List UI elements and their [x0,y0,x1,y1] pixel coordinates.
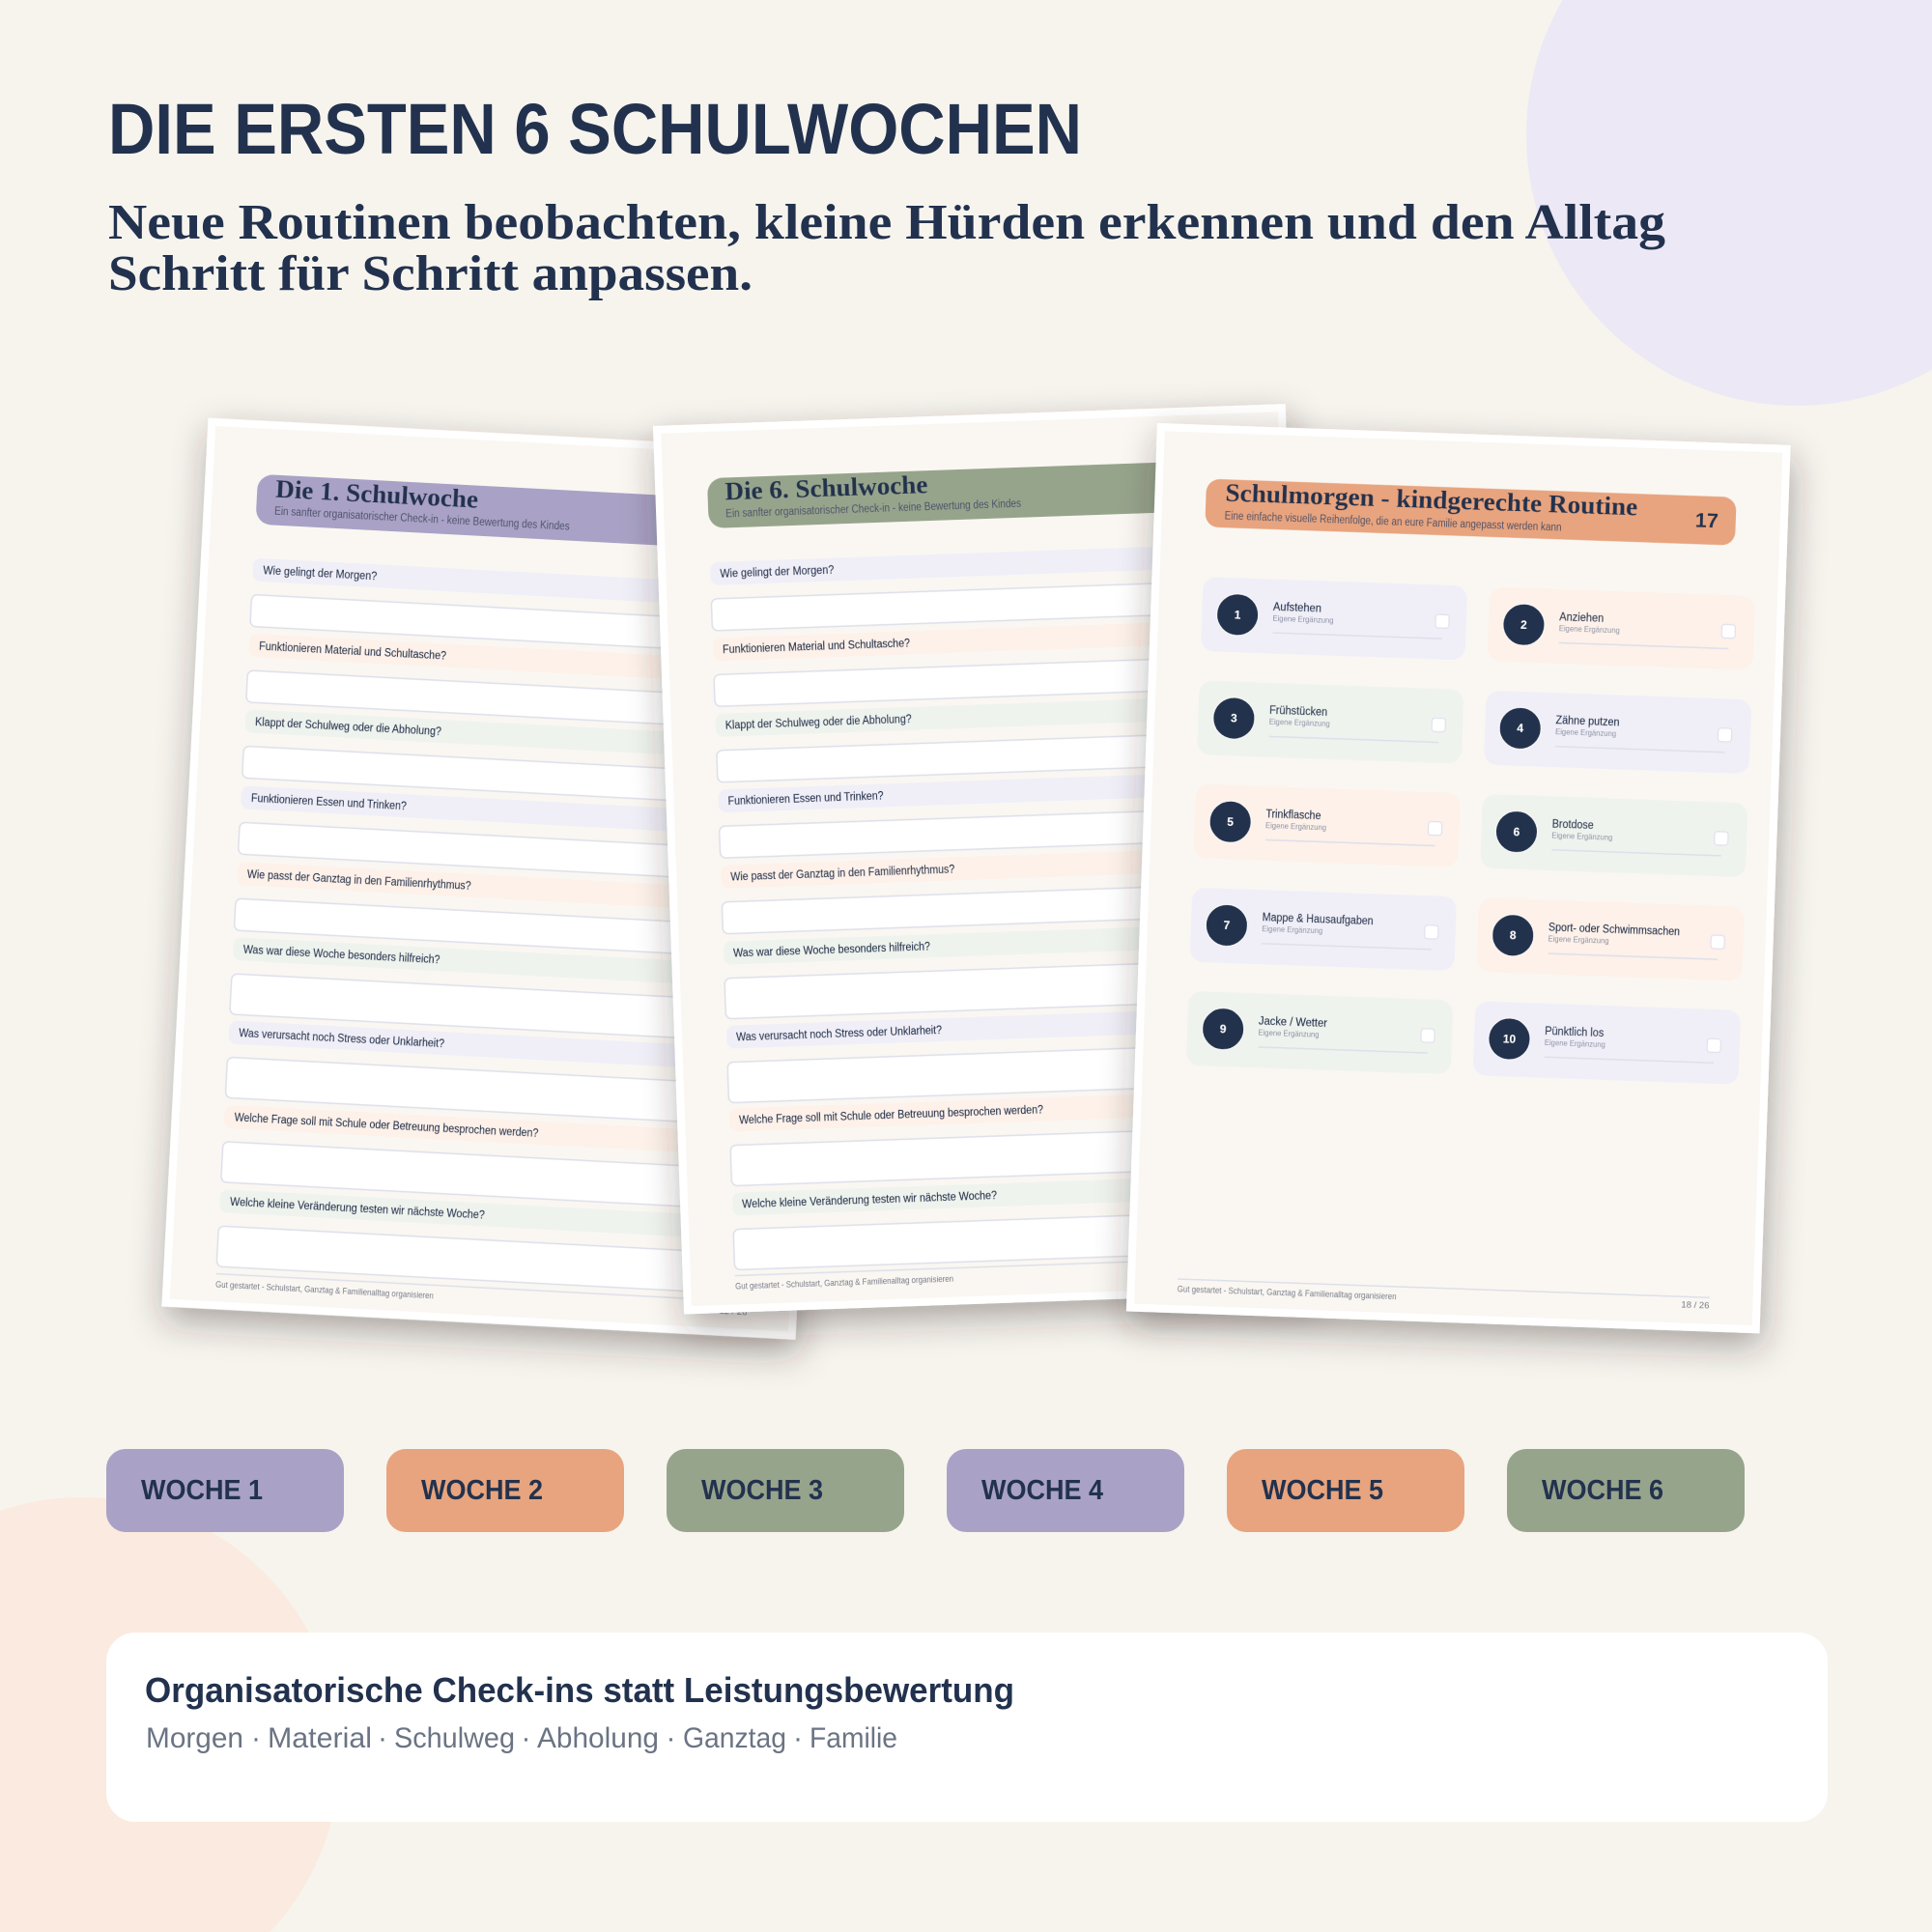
routine step 8 [1476,897,1745,981]
routine step 2: Eigene Ergänzung [1559,623,1620,635]
worksheet footer [1178,1279,1710,1313]
panel: worksheet Die 1. Schulwoche [161,418,842,1340]
question row 8 [221,1105,756,1210]
routine step 3: 3 [1231,711,1237,725]
routine step 1: 1 [1235,608,1241,621]
week pill 1 [106,1449,344,1532]
question row 6: Was war diese Woche besonders hilfreich? [733,941,930,959]
title: DIE ERSTEN 6 SCHULWOCHEN [108,89,1082,169]
routine step 2: 2 [1520,618,1527,632]
callout text: Familie [810,1722,897,1754]
callout card [106,1633,1828,1822]
worksheet header: Schulmorgen - kindgerechte Routine [1225,478,1638,521]
callout text: · [378,1722,387,1754]
question row 4: Funktionieren Essen und Trinken? [727,790,884,808]
callout text: Material [268,1722,372,1754]
week pill 2: WOCHE 2 [421,1475,543,1506]
week pill 3: WOCHE 3 [701,1475,823,1506]
routine step 2 [1488,586,1755,670]
week pill 1: WOCHE 1 [141,1475,263,1506]
question row 6 [724,923,1260,1019]
worksheet footer [735,1257,1269,1293]
worksheet footer: Gut gestartet - Schulstart, Ganztag & Familienalltag organisieren [1178,1284,1397,1302]
callout text: · [667,1722,676,1754]
worksheet header: Die 1. Schulwoche [275,475,479,514]
question row 1 [710,544,1246,631]
subtitle: Neue Routinen beobachten, kleine Hürden erkennen und den Alltag [108,195,1665,250]
callout heading: Organisatorische Check-ins statt Leistungsbewertung [145,1670,1014,1710]
routine step 10: Eigene Ergänzung [1545,1037,1605,1049]
question row 9: Welche kleine Veränderung testen wir nächste Woche? [742,1190,997,1210]
worksheet header [707,460,1242,528]
question row 7 [726,1007,1263,1103]
callout text [146,1722,897,1754]
routine step 5: 5 [1227,815,1235,829]
question row 9 [732,1174,1268,1270]
question row 4 [718,771,1254,858]
routine step 7 [1190,888,1457,971]
routine step 6: Brotdose [1552,818,1594,832]
routine step 10: 10 [1503,1032,1517,1046]
week pill 5 [1227,1449,1464,1532]
routine step 4: Eigene Ergänzung [1555,726,1616,738]
question row 2: Funktionieren Material und Schultasche? [259,641,446,663]
routine step 1: Eigene Ergänzung [1272,613,1334,625]
question row 1: Wie gelingt der Morgen? [720,565,835,581]
worksheet footer [215,1274,748,1318]
question row 2 [246,634,781,730]
week pill 6 [1507,1449,1745,1532]
week pill 2 [386,1449,624,1532]
worksheet header: Die 6. Schulwoche [724,470,928,505]
routine step 8: 8 [1510,928,1517,942]
routine step 3: Frühstücken [1269,705,1327,719]
question row 4 [238,785,773,882]
worksheet header [1205,478,1737,546]
routine step 7: Mappe & Hausaufgaben [1262,912,1374,927]
question row 4: Funktionieren Essen und Trinken? [251,793,407,812]
worksheet footer: Gut gestartet - Schulstart, Ganztag & Familienalltag organisieren [735,1274,953,1293]
callout text: Abholung [537,1722,659,1754]
subtitle [108,195,1665,301]
week pill 4 [947,1449,1184,1532]
callout text: · [522,1722,531,1754]
decorative circle: peach bottom left [0,1497,340,1932]
routine step 9: Eigene Ergänzung [1258,1027,1320,1039]
question row 7: Was verursacht noch Stress oder Unklarheit? [239,1028,444,1050]
week pill 3 [667,1449,904,1532]
question row 3: Klappt der Schulweg oder die Abholung? [725,714,912,732]
question row 7: Was verursacht noch Stress oder Unklarheit? [736,1025,942,1043]
question row 6 [230,937,765,1042]
worksheet header [255,474,789,552]
worksheet footer: 12 / 26 [719,1306,748,1318]
routine step 8: Eigene Ergänzung [1548,934,1609,946]
question row 9: Welche kleine Veränderung testen wir nächste Woche? [230,1197,485,1222]
question row 1: Wie gelingt der Morgen? [263,565,378,582]
worksheet header: 17 [1694,509,1719,532]
panel: worksheet Die 6. Schulwoche [653,404,1317,1314]
question row 3 [715,696,1252,782]
week pill 6: WOCHE 6 [1542,1475,1663,1506]
question row 9 [216,1189,753,1294]
callout text: · [793,1722,803,1754]
question row 8 [729,1090,1265,1186]
week pill 5: WOCHE 5 [1262,1475,1383,1506]
routine step 9: Jacke / Wetter [1259,1015,1327,1030]
routine step 4: 4 [1517,722,1524,735]
question row 2: Funktionieren Material und Schultasche? [723,638,910,656]
routine step 5: Eigene Ergänzung [1265,820,1326,832]
routine step 10 [1473,1001,1741,1085]
routine step 8: Sport- oder Schwimmsachen [1548,923,1680,938]
panel: worksheet Schulmorgen routine [1126,423,1791,1333]
question row 5: Wie passt der Ganztag in den Familienrhythmus? [730,864,954,883]
callout text: Schulweg [394,1722,515,1754]
worksheet header: Ein sanfter organisatorischer Check-in - keine Bewertung des Kindes [725,498,1021,520]
question row 3 [242,709,778,806]
routine step 4: Zähne putzen [1555,715,1620,728]
routine step 9 [1186,991,1453,1074]
worksheet content [1178,478,1759,1314]
routine step 4 [1484,691,1751,774]
question row 1 [250,558,785,654]
question row 8: Welche Frage soll mit Schule oder Betreuung besprochen werden? [739,1104,1043,1126]
routine step 1: Aufstehen [1273,602,1321,614]
routine step 7: Eigene Ergänzung [1262,923,1323,935]
routine step 10: Pünktlich los [1545,1026,1605,1039]
question row 8: Welche Frage soll mit Schule oder Betreuung besprochen werden? [234,1112,539,1140]
routine step 3 [1197,680,1464,764]
question row 7 [225,1020,761,1125]
routine step 3: Eigene Ergänzung [1269,717,1330,728]
subtitle: Schritt für Schritt anpassen. [108,246,753,301]
callout text: Morgen [146,1722,243,1754]
worksheet header: Ein sanfter organisatorischer Check-in - keine Bewertung des Kindes [274,506,570,533]
question row 5: Wie passt der Ganztag in den Familienrhythmus? [247,869,471,893]
routine step 6: Eigene Ergänzung [1551,830,1613,842]
routine step 7: 7 [1223,919,1231,932]
week pill 4: WOCHE 4 [981,1475,1103,1506]
routine step 2: Anziehen [1559,611,1604,625]
callout text: Ganztag [683,1722,786,1754]
routine step 5: Trinkflasche [1265,809,1321,822]
routine step 1 [1201,577,1467,661]
routine step 6 [1480,794,1748,877]
routine step 9: 9 [1220,1022,1227,1036]
callout text: · [251,1722,261,1754]
question row 6: Was war diese Woche besonders hilfreich? [242,945,440,966]
question row 5 [234,862,769,958]
worksheet footer: 18 / 26 [1681,1299,1710,1311]
question row 5 [721,847,1257,934]
worksheet footer: Gut gestartet - Schulstart, Ganztag & Familienalltag organisieren [215,1280,434,1301]
routine step 6: 6 [1513,825,1520,838]
worksheet header: Eine einfache visuelle Reihenfolge, die an eure Familie angepasst werden kann [1224,510,1562,533]
decorative circle: lavender top right [1526,0,1932,406]
routine step 5 [1193,783,1461,867]
question row 3: Klappt der Schulweg oder die Abholung? [255,717,441,738]
question row 2 [713,619,1249,706]
